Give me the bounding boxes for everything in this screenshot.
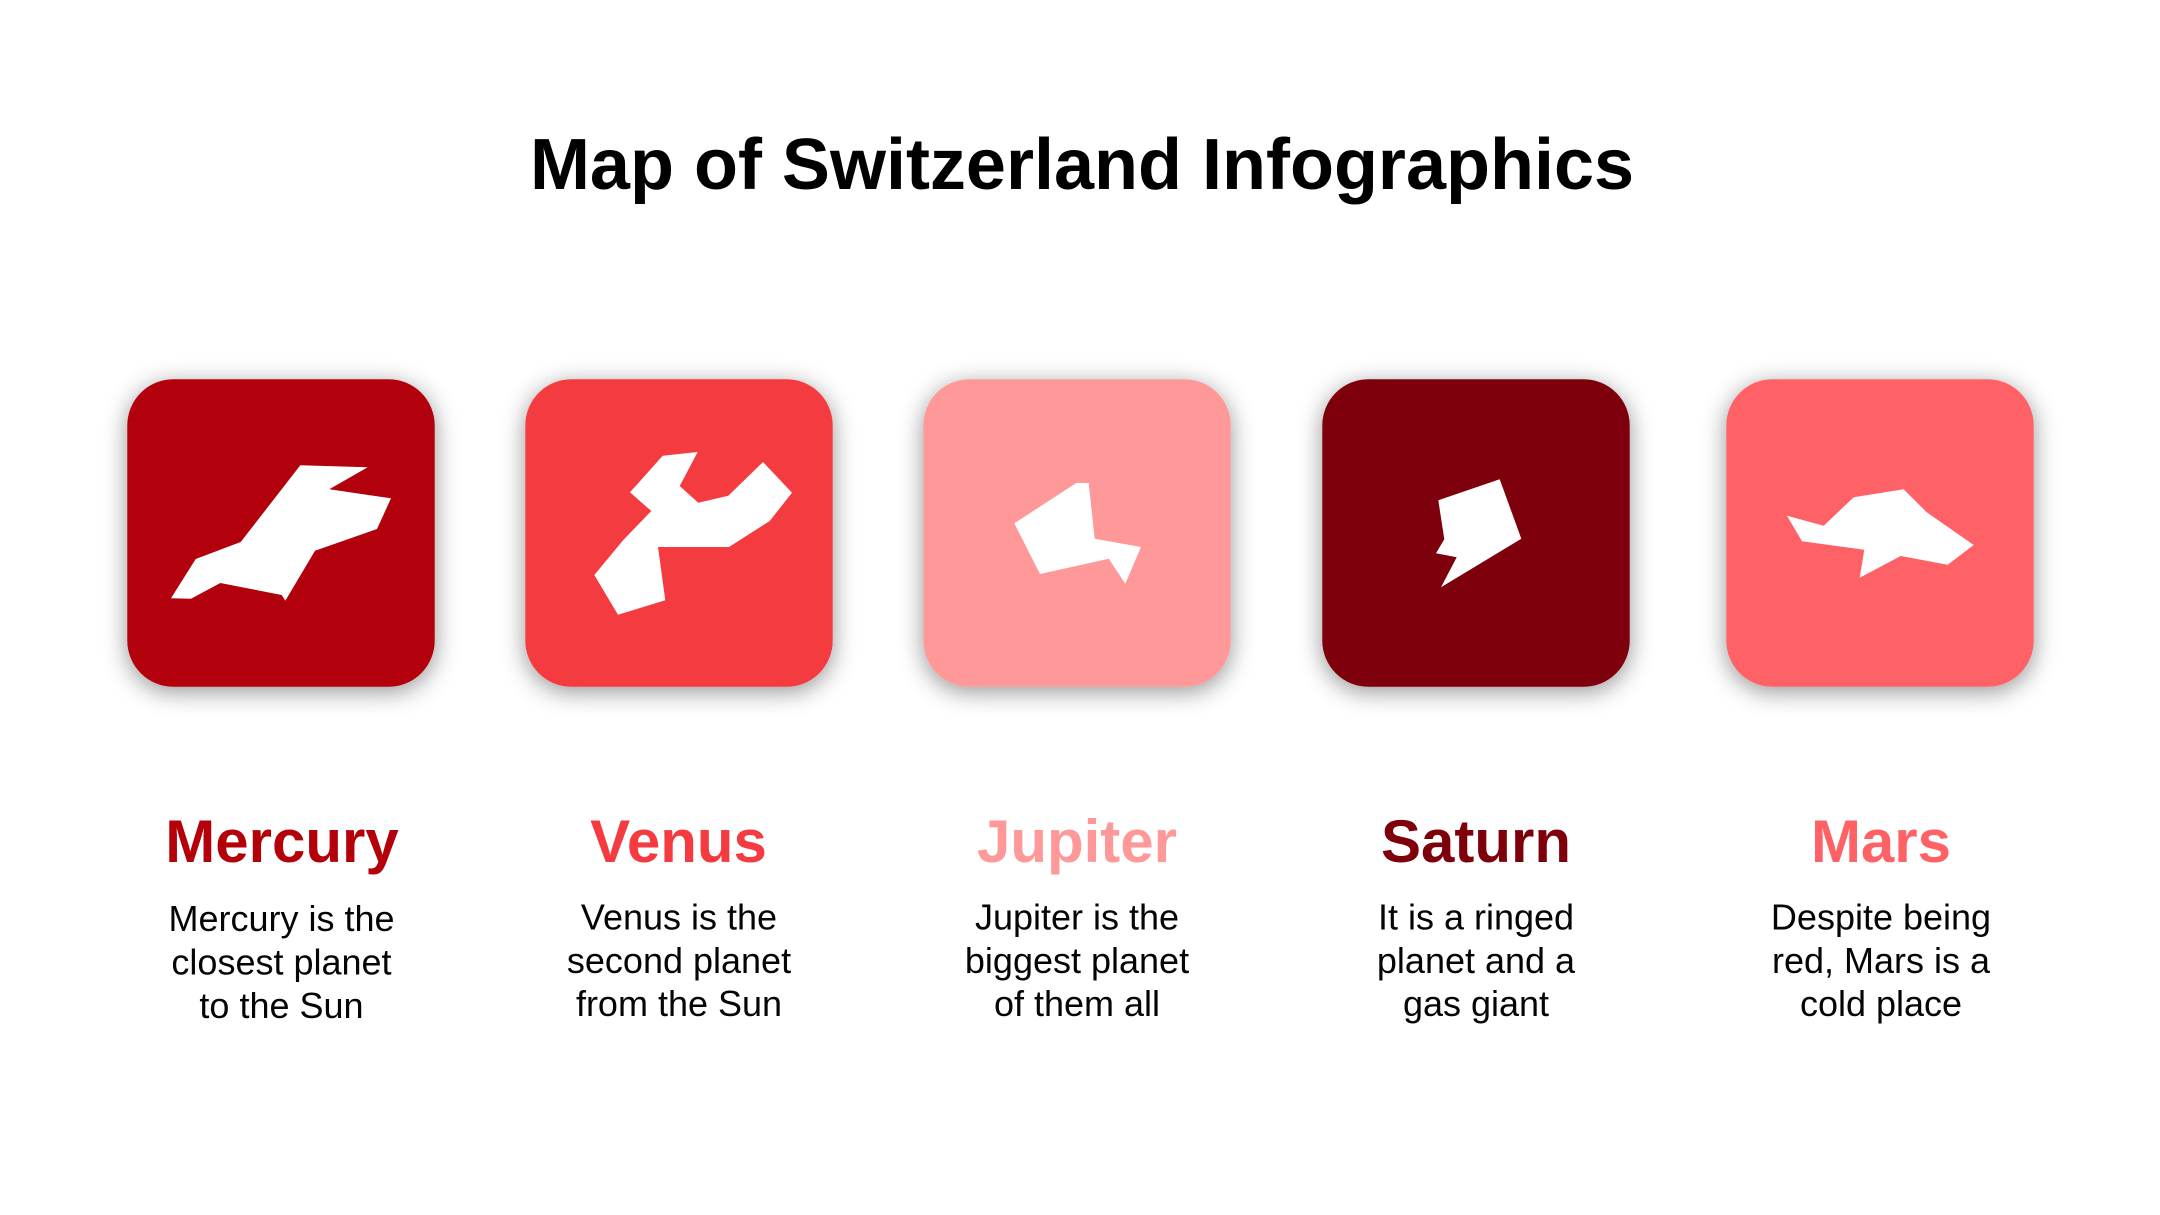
title: Map of Switzerland Infographics [530, 125, 1634, 205]
heading: Saturn: Saturn [1381, 808, 1571, 875]
panel: Mars [1726, 379, 2034, 1024]
description: Mars: Despite being [1771, 896, 1991, 938]
icon card: Mars [1726, 379, 2034, 687]
description: Saturn: gas giant [1403, 983, 1549, 1024]
description: Venus: from the Sun [576, 983, 782, 1024]
panel: Venus [525, 379, 833, 1024]
heading: Mercury: Mercury [165, 808, 399, 875]
heading: Mars: Mars [1811, 808, 1951, 875]
description: Mercury: Mercury is the [168, 898, 395, 939]
panel: Saturn [1322, 379, 1630, 1024]
panel: Jupiter [923, 379, 1231, 1024]
description: Mars: cold place [1800, 983, 1962, 1024]
description: Mars: red, Mars is a [1772, 940, 1991, 981]
description: Jupiter: Jupiter is the [975, 896, 1179, 938]
description: Saturn: planet and a [1377, 940, 1576, 981]
description: Mercury: to the Sun [199, 985, 364, 1026]
description: Jupiter: of them all [994, 983, 1160, 1024]
panel: Mercury [127, 379, 435, 1026]
icon card: Jupiter [923, 379, 1231, 687]
icon card: Mercury [127, 379, 435, 687]
description: Jupiter: biggest planet [965, 940, 1189, 981]
description: Venus: second planet [567, 940, 791, 981]
description: Mercury: closest planet [171, 942, 392, 982]
heading: Venus: Venus [590, 808, 767, 875]
icon card: Venus [525, 379, 833, 687]
heading: Jupiter: Jupiter [977, 808, 1177, 875]
description: Saturn: It is a ringed [1378, 896, 1574, 938]
icon card: Saturn [1322, 379, 1630, 687]
description: Venus: Venus is the [581, 896, 777, 938]
